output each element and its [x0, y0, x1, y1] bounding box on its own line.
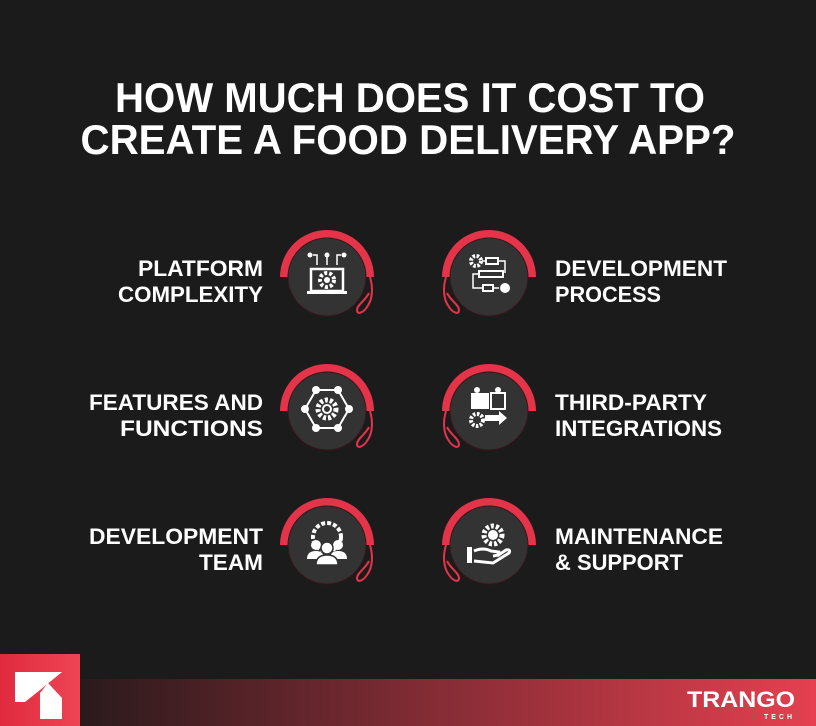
- footer bar: [80, 679, 816, 726]
- item: maintenance & support: & SUPPORT: [555, 550, 684, 575]
- item: development process: [442, 230, 728, 316]
- item: features and functions: [89, 364, 374, 450]
- logo square: [0, 654, 80, 726]
- brand logo: TECH: [764, 714, 795, 721]
- brand logo: [687, 687, 795, 721]
- item: platform complexity: COMPLEXITY: [118, 282, 263, 307]
- brand logo: TRANGO: [687, 687, 795, 712]
- item: maintenance & support: [442, 498, 723, 584]
- item: development team: TEAM: [199, 550, 263, 575]
- icon: laptop gear: [307, 252, 347, 294]
- item: development process: PROCESS: [555, 282, 661, 307]
- title: [80, 74, 736, 163]
- item: platform complexity: PLATFORM: [138, 256, 263, 281]
- item: maintenance & support: MAINTENANCE: [555, 524, 723, 549]
- item: third-party integrations: THIRD-PARTY: [555, 390, 707, 415]
- icon: process flow: [471, 256, 510, 293]
- title: HOW MUCH DOES IT COST TO: [115, 74, 705, 121]
- icon: hand with gear: [467, 526, 510, 563]
- title: CREATE A FOOD DELIVERY APP?: [80, 116, 736, 163]
- item: development team: DEVELOPMENT: [89, 524, 264, 549]
- item: features and functions: FEATURES AND: [89, 390, 263, 415]
- item: platform complexity: [118, 230, 374, 316]
- item: development process: DEVELOPMENT: [555, 256, 728, 281]
- icon: team gear: [307, 523, 347, 565]
- icon: puzzle and arrow: [471, 387, 507, 426]
- item: third-party integrations: INTEGRATIONS: [555, 416, 722, 441]
- icon: gear network: [301, 386, 353, 432]
- item: features and functions: FUNCTIONS: [120, 416, 263, 441]
- item: third-party integrations: [442, 364, 722, 450]
- item: development team: [89, 498, 374, 584]
